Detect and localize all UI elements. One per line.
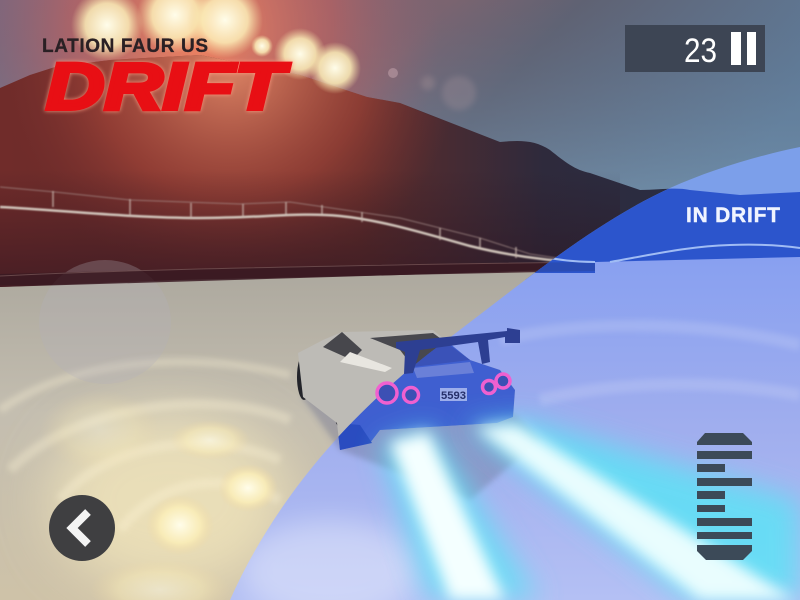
- license plate: 5593: [441, 390, 466, 402]
- car wheels: [297, 354, 348, 428]
- exhaust beams: [380, 420, 800, 600]
- mountain range: [0, 55, 800, 290]
- back button: [49, 495, 115, 561]
- rear wing: [396, 328, 520, 374]
- back chevron: [72, 512, 88, 544]
- timer panel: [625, 25, 765, 72]
- drift logo: DRIFT: [46, 49, 290, 123]
- trackside fence far: [0, 262, 595, 287]
- car body blue side: [338, 346, 515, 450]
- title: [42, 36, 290, 123]
- timer value: 23: [684, 32, 717, 70]
- trackside barrier: [0, 187, 590, 263]
- gear indicator: [697, 433, 752, 560]
- sky: [0, 0, 800, 300]
- car shadow: [300, 395, 540, 500]
- car windows: [323, 332, 362, 360]
- ground: [0, 260, 800, 600]
- in drift label: IN DRIFT: [686, 204, 780, 227]
- car: [297, 328, 540, 500]
- pause icon: [731, 32, 756, 65]
- subtitle: LATION FAUR US: [42, 36, 208, 57]
- car body: [298, 330, 515, 450]
- car highlight: [340, 352, 392, 372]
- blue light overlay: [230, 147, 800, 600]
- tail lights: [377, 374, 510, 403]
- sun and lens flares: [71, 0, 476, 110]
